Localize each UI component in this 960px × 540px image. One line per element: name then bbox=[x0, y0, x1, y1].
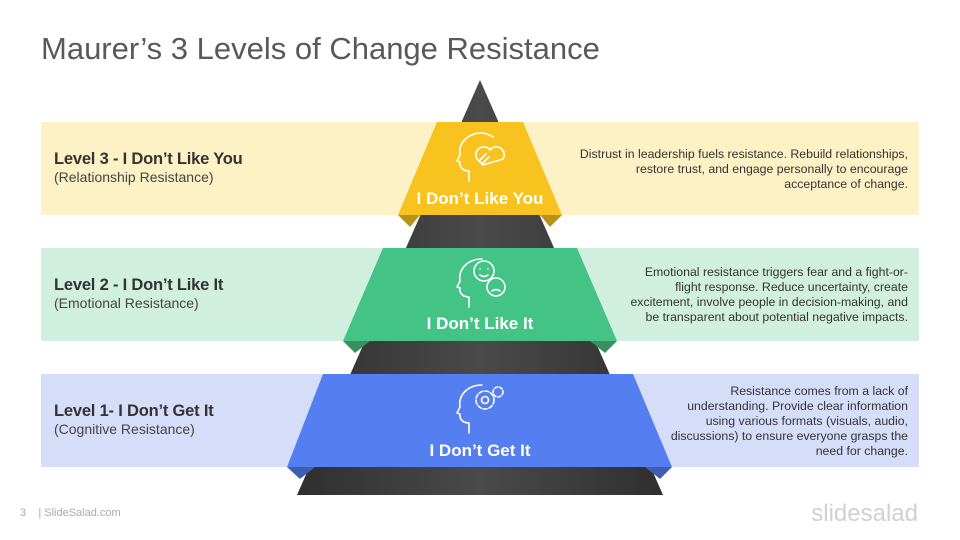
level 3 description: Distrust in leadership fuels resistance. Rebuild relationships, bbox=[580, 147, 908, 161]
level 2 description: excitement, involve people in decision-making, and bbox=[630, 295, 908, 309]
level 2 text: (Emotional Resistance) bbox=[54, 295, 199, 311]
level 2 description: be transparent about potential negative impacts. bbox=[645, 310, 908, 324]
level 1 text: (Cognitive Resistance) bbox=[54, 421, 195, 437]
level 3 description: restore trust, and engage personally to encourage bbox=[636, 162, 908, 176]
level 1 trapezoid bbox=[287, 374, 672, 479]
title: Maurer’s 3 Levels of Change Resistance bbox=[41, 31, 600, 66]
level 1 description: need for change. bbox=[816, 444, 908, 458]
level 2 text bbox=[54, 276, 224, 311]
trapezoid labels: I Don’t Get It bbox=[429, 441, 531, 460]
level 3 description bbox=[580, 147, 908, 191]
level 1 description bbox=[671, 384, 908, 458]
level 2 trapezoid bbox=[343, 248, 617, 353]
level 2 description bbox=[630, 265, 908, 324]
level 1 description: understanding. Provide clear information bbox=[687, 399, 908, 413]
level 1 description: discussions) to ensure everyone grasps the bbox=[671, 429, 908, 443]
icons bbox=[457, 133, 505, 433]
trapezoid labels: I Don’t Like It bbox=[427, 314, 534, 333]
trapezoid labels: I Don’t Like You bbox=[417, 189, 543, 208]
level 3 text bbox=[54, 150, 243, 185]
level 1 description: Resistance comes from a lack of bbox=[730, 384, 908, 398]
logo: slidesalad bbox=[811, 500, 918, 527]
trapezoid labels bbox=[417, 189, 543, 460]
level 2 text: Level 2 - I Don’t Like It bbox=[54, 276, 223, 294]
level 2 description: Emotional resistance triggers fear and a fight-or- bbox=[645, 265, 908, 279]
band: level 2 bbox=[41, 248, 919, 341]
band: level 1 bbox=[41, 374, 919, 467]
band: level 3 bbox=[41, 122, 919, 215]
level 3 text: Level 3 - I Don’t Like You bbox=[54, 150, 243, 168]
level 1 description: using various formats (visuals, audio, bbox=[706, 414, 908, 428]
footer: 3 | SlideSalad.com bbox=[20, 507, 121, 519]
level 2 description: flight response. Reduce uncertainty, create bbox=[675, 280, 908, 294]
level 3 trapezoid bbox=[398, 122, 562, 227]
level 3 text: (Relationship Resistance) bbox=[54, 169, 214, 185]
level 1 text: Level 1- I Don’t Get It bbox=[54, 402, 214, 420]
level 1 text bbox=[54, 402, 214, 437]
level 3 description: acceptance of change. bbox=[784, 177, 908, 191]
